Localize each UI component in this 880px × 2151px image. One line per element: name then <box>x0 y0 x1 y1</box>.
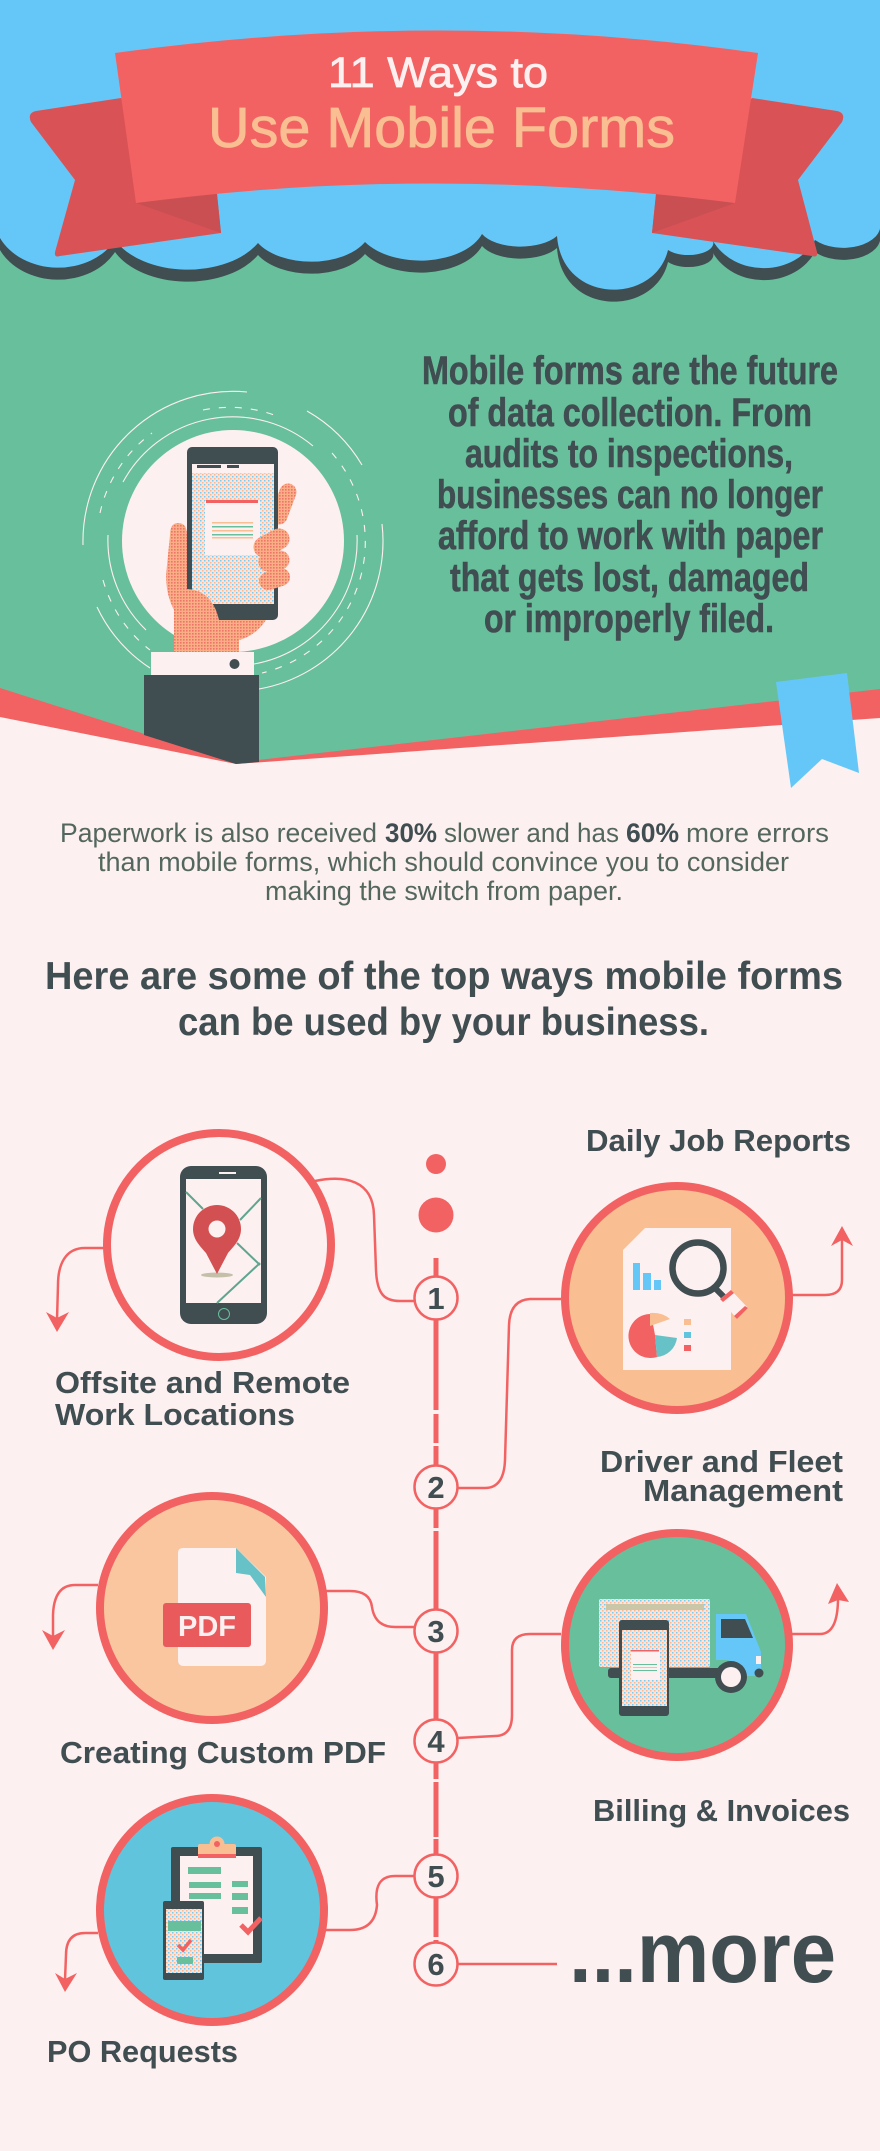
signal rings <box>83 391 383 689</box>
paragraph: paperwork stats: slower and has <box>444 818 619 848</box>
shirt cuff <box>151 652 254 675</box>
paragraph: paperwork stats: more errors <box>686 818 829 848</box>
paragraph: paperwork stats: than mobile forms, which should convince you to consider <box>98 847 789 877</box>
label: offsite <box>55 1365 350 1432</box>
intro text: audits to inspections, <box>465 432 793 476</box>
timeline line <box>434 1258 438 1950</box>
title ribbon <box>30 30 843 256</box>
form on phone <box>205 500 260 555</box>
label: driver and fleet <box>600 1444 843 1508</box>
arrow: offsite <box>46 1248 105 1332</box>
icon: pdf document: PDF <box>178 1611 236 1643</box>
numbered nodes: 5 <box>427 1859 445 1894</box>
icon: delivery truck with phone <box>565 1533 789 1757</box>
icon: report with magnifier <box>565 1186 789 1410</box>
label: daily job reports: Daily Job Reports <box>586 1123 851 1158</box>
arrow: daily job reports <box>791 1226 853 1295</box>
paragraph: paperwork stats <box>60 818 829 906</box>
arrow: pdf <box>42 1585 98 1650</box>
illustration: hand holding phone <box>83 391 383 764</box>
top finger <box>279 492 288 516</box>
paragraph: paperwork stats: Paperwork is also received <box>60 818 377 848</box>
section heading: can be used by your business. <box>178 1001 709 1044</box>
white circle <box>122 430 344 652</box>
numbered nodes: 4 <box>427 1724 445 1759</box>
hand palm and thumb <box>166 523 266 652</box>
phone status bar <box>192 464 274 473</box>
icon: clipboard with phone <box>100 1798 324 2022</box>
ribbon right tail <box>652 98 843 256</box>
cuff button <box>230 659 240 669</box>
title line 2: Use Mobile Forms <box>208 96 675 160</box>
ribbon left fold <box>136 194 221 233</box>
numbered nodes: 2 <box>427 1470 445 1505</box>
intro text <box>422 349 838 641</box>
more text: ...more <box>569 1905 836 2001</box>
connectors <box>315 1179 561 1964</box>
title line 1: 11 Ways to <box>328 49 548 97</box>
red band under green panel <box>0 680 880 764</box>
arrow: fleet <box>791 1583 849 1634</box>
icon: phone with map pin <box>107 1133 331 1357</box>
paragraph: paperwork stats: making the switch from paper. <box>265 876 623 906</box>
ribbon left tail <box>30 98 221 256</box>
ribbon main band <box>115 30 758 203</box>
intro text: or improperly filed. <box>484 597 774 641</box>
label: driver and fleet: Driver and Fleet <box>600 1444 843 1479</box>
section heading: Here are some of the top ways mobile forms <box>45 955 843 998</box>
bookmark ribbon <box>776 673 859 788</box>
phone screen <box>192 464 274 604</box>
icon: pdf document <box>100 1496 324 1720</box>
paragraph: paperwork stats: 60% <box>626 818 679 848</box>
numbered nodes: 3 <box>427 1614 445 1649</box>
label: creating custom pdf: Creating Custom PDF <box>60 1735 386 1770</box>
ribbon right fold <box>652 194 735 233</box>
section heading <box>45 955 843 1044</box>
label: offsite: Offsite and Remote <box>55 1365 350 1400</box>
timeline large dot <box>418 1198 454 1232</box>
numbered nodes: 6 <box>427 1947 445 1982</box>
phone body <box>187 447 278 620</box>
label: driver and fleet: Management <box>643 1473 843 1508</box>
numbered nodes: 1 <box>427 1281 445 1316</box>
arrow: po requests <box>55 1933 98 1992</box>
cloud header <box>0 0 880 302</box>
label: billing and invoices: Billing & Invoices <box>593 1793 850 1828</box>
paragraph: paperwork stats: 30% <box>385 818 437 848</box>
label: po requests: PO Requests <box>47 2034 238 2069</box>
numbered nodes <box>414 1276 458 1986</box>
panel: green intro background <box>0 200 880 763</box>
label: offsite: Work Locations <box>55 1397 295 1432</box>
jacket sleeve <box>144 675 259 764</box>
timeline small dot <box>426 1154 446 1174</box>
fingers <box>264 539 281 581</box>
